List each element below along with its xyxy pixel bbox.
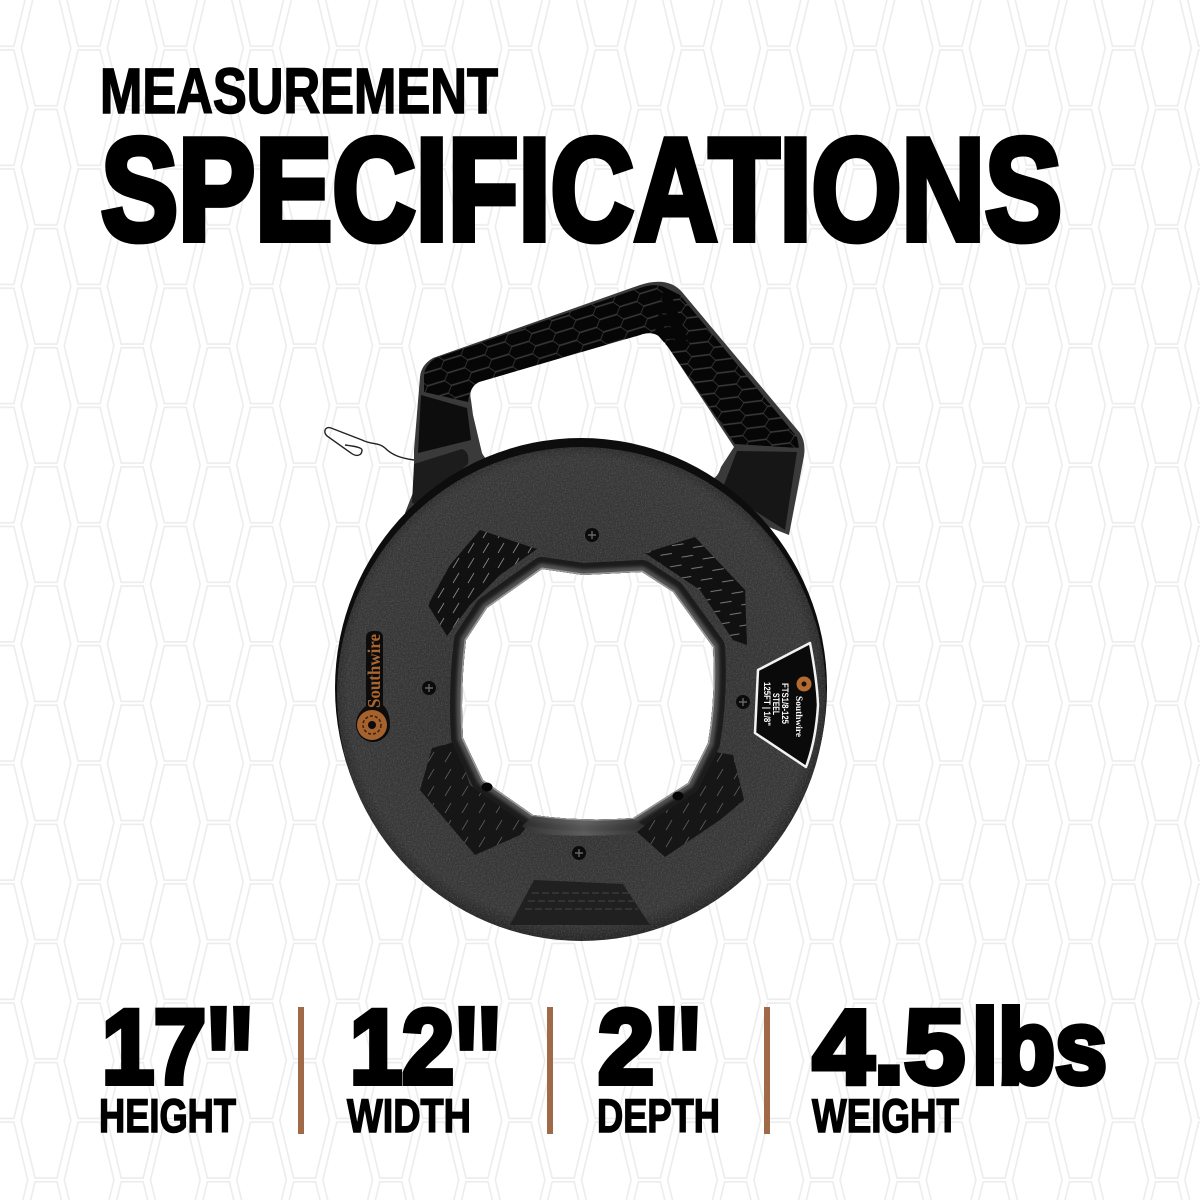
handle lower block: left — [418, 395, 471, 453]
reel face — [337, 447, 826, 941]
grip panel: bottom right — [637, 752, 744, 857]
label: WEIGHT — [812, 1089, 959, 1142]
label: HEIGHT — [99, 1089, 236, 1142]
divider — [764, 1007, 770, 1134]
screw: left — [422, 681, 436, 695]
bottom lighter band — [522, 816, 645, 836]
badge backing — [356, 631, 390, 742]
handle grip texture: top — [424, 285, 690, 402]
label length: 125FT | 1/8" — [761, 682, 772, 726]
inch mark: " — [204, 971, 256, 1159]
number: 4.5 — [813, 989, 965, 1106]
divider — [298, 1007, 304, 1134]
handle body — [405, 282, 804, 535]
label plate — [755, 643, 818, 767]
bottom embossed plate — [510, 880, 650, 925]
wire latch — [412, 449, 468, 505]
spec: width — [347, 971, 504, 1159]
hole notch: left — [482, 782, 492, 792]
title line: MEASUREMENT: MEASUREMENT — [100, 55, 498, 127]
spec: weight — [812, 989, 1107, 1142]
hole notch: right — [672, 792, 684, 800]
product label — [755, 643, 818, 767]
label material: STEEL — [770, 693, 781, 715]
inch mark: " — [652, 971, 704, 1159]
value: 17 — [102, 989, 206, 1106]
value: 2 — [598, 989, 654, 1106]
label logo — [796, 676, 812, 692]
brand badge: left — [356, 631, 390, 742]
handle grip texture: right — [655, 287, 799, 448]
grip panel: top left — [428, 530, 537, 636]
badge logo — [357, 710, 387, 740]
reel back rim — [335, 438, 827, 938]
handle lower block: right — [722, 451, 797, 530]
badge wordmark: Southwire — [364, 634, 384, 708]
title — [100, 55, 1062, 270]
value — [813, 989, 1107, 1106]
grip panel: top right — [645, 537, 747, 645]
screw: bottom — [572, 846, 586, 860]
value: 12 — [350, 989, 454, 1106]
spec: height — [99, 971, 256, 1159]
pull wire loop — [325, 428, 414, 460]
label brand: Southwire — [793, 696, 803, 737]
inch mark: " — [452, 971, 504, 1159]
label: WIDTH — [347, 1089, 471, 1142]
grip panel: bottom left — [420, 742, 530, 855]
spec: depth — [597, 971, 720, 1159]
hole bevel lip — [462, 569, 714, 819]
label model: FTS1/8-125 — [779, 683, 790, 725]
unit: lbs — [972, 989, 1107, 1106]
handle — [405, 282, 804, 535]
label: DEPTH — [597, 1089, 720, 1142]
product photo: fish tape reel — [325, 282, 827, 941]
divider — [547, 1007, 553, 1134]
screw: right — [736, 695, 750, 709]
screw: top — [585, 528, 599, 542]
